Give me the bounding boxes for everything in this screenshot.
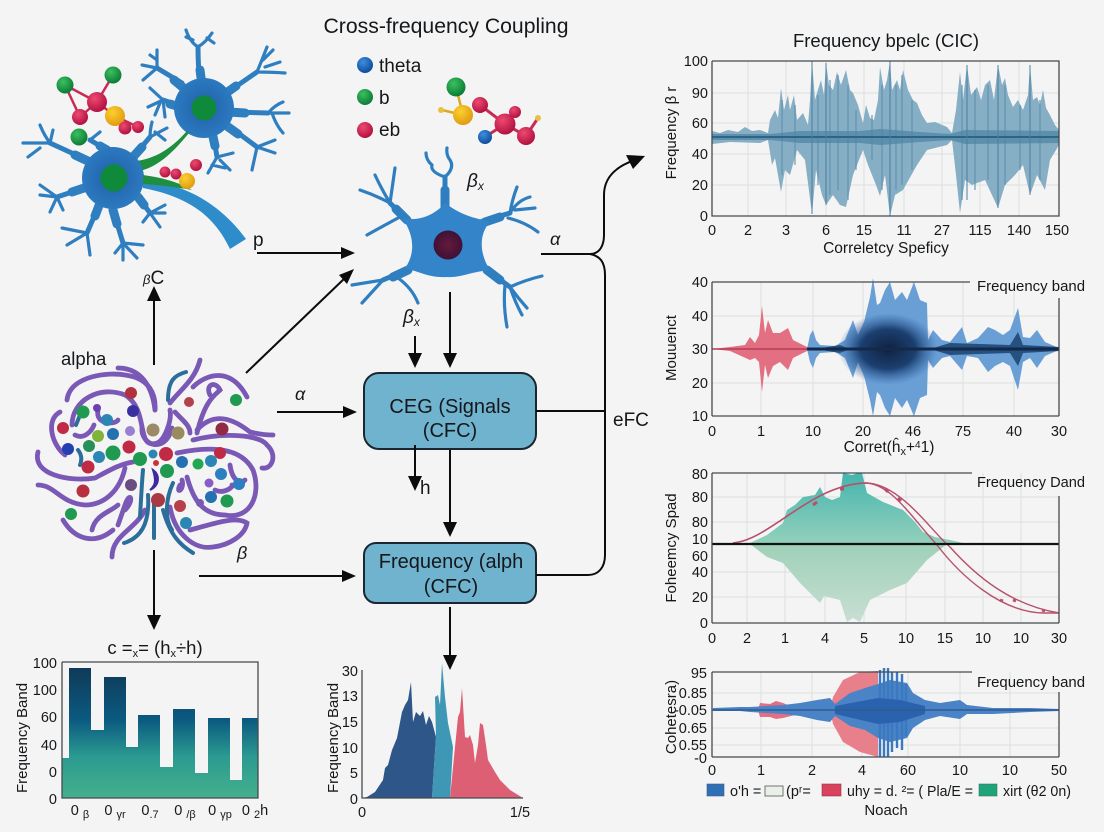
y axis labels: 60: [692, 549, 708, 565]
y axis labels: 60: [41, 710, 57, 726]
x axis labels: 2: [743, 631, 751, 647]
chart 1: frequency waveform: [663, 30, 1069, 257]
y axis labels: 80: [692, 515, 708, 531]
gridlines: [712, 282, 1059, 416]
baseline: [712, 543, 1059, 545]
legend: xirt (θ2 0n): [1003, 784, 1071, 800]
teal band: [432, 663, 453, 798]
chart heading: x: [133, 648, 139, 660]
x axis labels: 30: [1051, 424, 1067, 440]
y axis labels: 0: [49, 765, 57, 781]
x axis labels: 4: [821, 631, 829, 647]
frame: [62, 662, 258, 798]
y axis labels: 40: [692, 275, 708, 291]
x axis labels: 0: [242, 803, 250, 819]
centre trace: [712, 709, 1059, 711]
x axis labels: 0: [358, 805, 366, 821]
red burst left: [758, 701, 795, 719]
axon: green sheath: [143, 175, 192, 190]
x axis labels: 0: [708, 631, 716, 647]
x axis labels: [708, 631, 1067, 647]
x axis labels: h: [260, 803, 268, 819]
x axis labels: 15: [856, 223, 872, 239]
x axis labels: 2: [808, 763, 816, 779]
x axis labels: 0: [708, 763, 716, 779]
label: beta x upper: x: [477, 179, 485, 193]
box: CEG signals: CEG (Signals: [389, 396, 511, 418]
waveform: [712, 61, 1059, 216]
x axis labels: 0: [104, 803, 112, 819]
molecule: upper left: [56, 66, 144, 146]
nucleus: [100, 164, 128, 192]
y axis labels: 0.85: [679, 686, 707, 702]
centre trace: [807, 348, 1059, 350]
y axis labels: 20: [692, 590, 708, 606]
box: frequency: (CFC): [424, 576, 478, 598]
label: alpha: alpha: [61, 348, 107, 369]
right inner fuzz: [930, 332, 1059, 366]
x axis title: Correletcy Speficy: [823, 240, 949, 257]
y axis labels: 80: [692, 490, 708, 506]
y axis title: Cohetesra): [663, 680, 680, 754]
illustration: connected neurons with molecules: [23, 30, 289, 260]
x axis labels: 0: [208, 803, 216, 819]
teal fibres: [76, 372, 193, 553]
bar chart: frequency band: [14, 637, 268, 821]
x axis title: Corret(ĥ: [844, 439, 900, 456]
y axis labels: 10: [342, 741, 358, 757]
curve markers: [813, 489, 1045, 611]
nucleus: [434, 230, 462, 260]
box: frequency: Frequency (alph: [379, 551, 523, 573]
x axis labels: 40: [1006, 424, 1022, 440]
x axis title: 4: [915, 440, 921, 451]
label: beta C: βC: [142, 268, 164, 289]
chart heading: c =: [107, 637, 133, 658]
y axis labels: 20: [692, 376, 708, 392]
x axis labels: β: [83, 809, 89, 821]
x axis labels: 46: [905, 424, 921, 440]
coloured nodes: [57, 387, 245, 529]
x axis labels: [358, 805, 530, 821]
b item: b: [379, 88, 390, 109]
x axis labels: γr: [116, 809, 126, 821]
x axis labels: 0: [174, 803, 182, 819]
x axis labels: [708, 223, 1069, 239]
x axis title: 1): [921, 439, 934, 456]
neuron: centre: [352, 148, 542, 327]
streak texture: [782, 75, 1040, 200]
axes: [712, 473, 1059, 623]
axes: [362, 670, 523, 798]
y axis labels: -0.05: [674, 703, 707, 719]
x axis labels: 4: [858, 763, 866, 779]
frame: [712, 61, 1059, 216]
y axis labels: 100: [684, 54, 708, 70]
x axis labels: /β: [186, 809, 196, 821]
x axis labels: [708, 424, 1067, 440]
x axis labels: [708, 763, 1067, 779]
axes: [712, 282, 1059, 416]
histogram: frequency band: [325, 663, 530, 821]
legend: uhy = d. ²= ( Pla/E =: [847, 784, 973, 800]
y axis title: Frequency β r: [663, 87, 680, 179]
x axis labels: 3: [782, 223, 790, 239]
theta item: theta: [379, 56, 422, 77]
legend: (pʳ=: [786, 784, 811, 800]
y axis labels: 20: [692, 178, 708, 194]
heading: Frequency bpelc (CIC): [793, 30, 979, 51]
y axis labels: [33, 656, 57, 808]
x axis labels: [71, 803, 268, 821]
axon: green link: [137, 131, 189, 171]
x axis labels: 15: [937, 631, 953, 647]
x axis labels: 5: [860, 631, 868, 647]
legend label: Frequency Dand: [977, 474, 1085, 491]
x axis labels: 50: [1051, 763, 1067, 779]
purple fibres: [37, 360, 273, 557]
red envelope: [712, 306, 807, 392]
label: p: p: [253, 230, 264, 251]
x axis labels: 1: [781, 631, 789, 647]
red dome: [830, 671, 878, 757]
dense centre band: [712, 129, 1059, 145]
y axis labels: 100: [33, 683, 57, 699]
y axis labels: 0.55: [679, 738, 707, 754]
blue envelope: [713, 680, 1059, 742]
x axis labels: 2: [744, 223, 752, 239]
y axis labels: 5: [350, 766, 358, 782]
chart heading: = (h: [138, 637, 170, 658]
x axis labels: 20: [855, 424, 871, 440]
legend: frequency dots: [357, 56, 422, 141]
y axis labels: 10: [692, 409, 708, 425]
bars: [62, 668, 258, 798]
x axis labels: 10: [1013, 631, 1029, 647]
legend: [707, 784, 1071, 800]
y axis labels: 0: [49, 792, 57, 808]
teal upper area: [730, 473, 967, 544]
x axis labels: 10: [805, 424, 821, 440]
navy band: [362, 682, 436, 798]
y axis title: Foheemcy Spad: [663, 493, 680, 603]
left inner fuzz: [815, 345, 850, 353]
label: h: h: [420, 478, 431, 499]
neuron: upper: [142, 30, 289, 173]
x axis labels: 30: [1051, 631, 1067, 647]
y axis labels: 100: [33, 656, 57, 672]
brain: oscillation network: [37, 360, 273, 557]
label: beta: β: [236, 543, 247, 563]
label: alpha arrow: α: [295, 384, 306, 404]
legend caption: Noach: [864, 802, 908, 819]
x axis labels: 0: [141, 803, 149, 819]
x axis labels: 2: [254, 809, 260, 821]
y axis labels: 40: [692, 565, 708, 581]
x axis labels: 1/5: [510, 805, 530, 821]
arrows: flow connections: [147, 155, 645, 670]
legend: o'h =: [730, 784, 761, 800]
x axis labels: γp: [220, 809, 232, 821]
neuron: lower: [23, 122, 167, 260]
y axis labels: 80: [692, 467, 708, 483]
x axis labels: 1: [757, 424, 765, 440]
x axis labels: 6: [822, 223, 830, 239]
chart heading: ÷h): [176, 637, 203, 658]
chart heading: x: [170, 648, 176, 660]
y axis labels: [692, 275, 708, 425]
x axis title: x: [900, 446, 906, 458]
mint lower area: [750, 544, 947, 622]
gridlines: [712, 473, 1059, 623]
x axis labels: 0: [708, 424, 716, 440]
x axis labels: 10: [952, 763, 968, 779]
box: CEG signals: (CFC): [423, 420, 477, 442]
axes: [712, 672, 1059, 757]
y axis labels: [674, 666, 707, 767]
inner burst dark: [838, 313, 938, 385]
x axis labels: 60: [900, 763, 916, 779]
y axis labels: 30: [342, 664, 358, 680]
tall blue stripes: [880, 668, 906, 757]
label: beta x lower: x: [413, 315, 421, 329]
phase curves: [733, 483, 1059, 613]
y axis title: Frequency Band: [325, 683, 342, 793]
eb item: eb: [379, 120, 400, 141]
outer envelope blue: [807, 278, 1059, 416]
x axis labels: 0: [708, 223, 716, 239]
chart 4: coherence waveform: [663, 666, 1085, 819]
chart 2: red and blue waveform: [663, 275, 1085, 458]
x axis title: +: [906, 439, 915, 456]
label: beta x lower: β: [403, 307, 414, 328]
x axis labels: 1: [757, 763, 765, 779]
spikes: [812, 61, 1030, 216]
label: eFC: eFC: [613, 410, 649, 431]
y axis labels: 30: [692, 342, 708, 358]
y axis labels: 15: [342, 715, 358, 731]
centre trace: [712, 136, 1059, 138]
x axis labels: 27: [934, 223, 950, 239]
x axis labels: 0: [71, 803, 79, 819]
x axis labels: 10: [975, 631, 991, 647]
title: Cross-frequency Coupling: [324, 15, 568, 38]
legend label: Frequency band: [977, 278, 1085, 295]
soma: [402, 203, 490, 277]
y axis labels: 10: [692, 532, 708, 548]
y axis labels: 0.65: [679, 721, 707, 737]
y axis labels: 13: [342, 689, 358, 705]
y axis labels: 0: [700, 616, 708, 632]
label: beta x upper: β: [467, 171, 478, 192]
x axis labels: 75: [955, 424, 971, 440]
x axis labels: 140: [1007, 223, 1031, 239]
box: frequency: [364, 543, 536, 603]
y axis labels: 60: [692, 116, 708, 132]
y axis labels: 40: [41, 738, 57, 754]
molecule: near axon: [160, 159, 202, 189]
y axis labels: 0: [700, 209, 708, 225]
axon: blue projection: [143, 181, 246, 249]
y axis labels: [342, 664, 358, 808]
y axis labels: 95: [691, 666, 707, 682]
gridlines: [712, 61, 1059, 216]
y axis labels: 90: [692, 86, 708, 102]
molecule: centre: [438, 78, 541, 145]
y axis labels: 40: [692, 147, 708, 163]
y axis labels: 0: [350, 792, 358, 808]
box: CEG signals: [364, 373, 536, 449]
x axis labels: 10: [1002, 763, 1018, 779]
gridlines: [712, 672, 1059, 757]
chart 3: area with phase curves: [663, 467, 1085, 647]
label: alpha right: α: [550, 229, 561, 249]
y axis labels: [692, 467, 708, 632]
dense centre: [835, 698, 925, 724]
y axis title: Mouuenct: [663, 314, 680, 381]
x axis labels: 11: [896, 223, 912, 239]
y axis labels: [684, 54, 708, 225]
y axis labels: -0: [694, 751, 707, 767]
x axis labels: 150: [1045, 223, 1069, 239]
x axis labels: .7: [149, 809, 159, 821]
x axis labels: 115: [968, 223, 992, 239]
red band: [450, 688, 523, 798]
x axis labels: 10: [898, 631, 914, 647]
nucleus: [192, 96, 216, 120]
legend label: Frequency band: [977, 674, 1085, 691]
y axis title: Frequency Band: [14, 683, 31, 793]
y axis labels: 40: [692, 309, 708, 325]
